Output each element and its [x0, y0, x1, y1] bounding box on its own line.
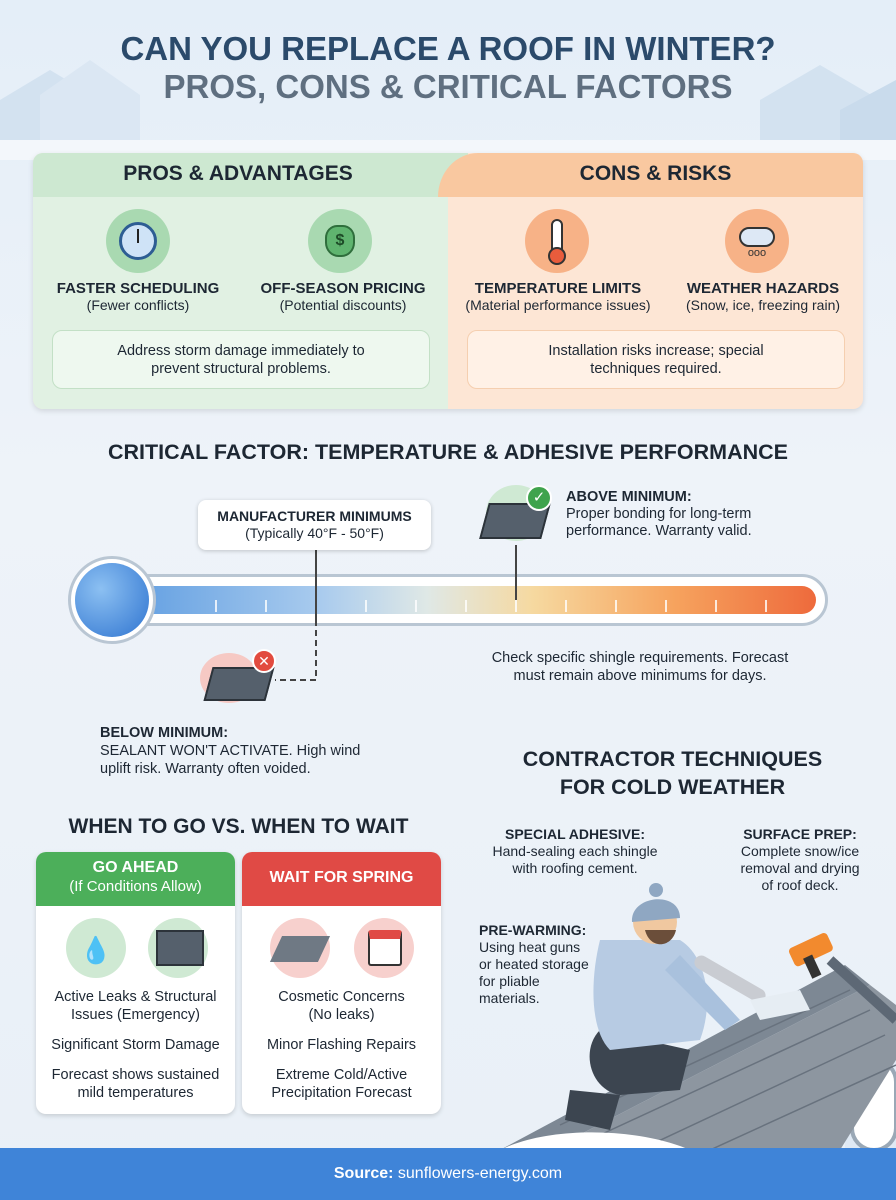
- snow: [500, 1132, 690, 1150]
- card: wait for spring: [242, 852, 441, 1114]
- text: special adhesive: [492, 826, 658, 876]
- card: go ahead: mild temperatures: [77, 1085, 194, 1101]
- text: pre-warming: or heated storage: [479, 956, 589, 972]
- chart: thermometer: [68, 556, 828, 644]
- text: above minimum: [566, 489, 752, 539]
- icon: rain cloud: [725, 209, 789, 273]
- card: go ahead: GO AHEAD: [93, 859, 178, 876]
- text: above minimum: ABOVE MINIMUM:: [566, 489, 692, 505]
- card: wait for spring: Precipitation Forecast: [271, 1085, 412, 1101]
- title: CAN YOU REPLACE A ROOF IN WINTER?: [120, 30, 776, 67]
- icon: shingle above: ✓: [533, 489, 545, 506]
- icon: shingle curl: [270, 918, 330, 978]
- icon: thermometer: [525, 209, 589, 273]
- heading: contractor techniques: [523, 747, 822, 799]
- footer: source: [0, 1148, 896, 1200]
- text: off season: OFF-SEASON PRICING: [260, 280, 426, 297]
- icon: rain cloud: ooo: [748, 247, 766, 259]
- caulk gun: [692, 953, 768, 1005]
- text: faster scheduling: FASTER SCHEDULING: [57, 280, 219, 297]
- heading: pros: PROS & ADVANTAGES: [123, 162, 353, 185]
- pros side: [33, 153, 448, 409]
- text: off season: [260, 280, 426, 313]
- callout: cons: Installation risks increase; special: [548, 343, 764, 359]
- callout: manufacturer minimums: MANUFACTURER MINIMUMS: [217, 508, 412, 524]
- heading: cons: CONS & RISKS: [580, 162, 731, 185]
- icon: leak: 💧: [80, 935, 112, 965]
- illustration: roof and worker: [504, 883, 896, 1148]
- callout: cons: techniques required.: [590, 361, 722, 377]
- callout: manufacturer minimums: [198, 500, 431, 550]
- icon: calendar: [354, 918, 414, 978]
- title: [120, 30, 776, 105]
- text: pre-warming: materials.: [479, 990, 540, 1006]
- card: go ahead: Significant Storm Damage: [51, 1037, 220, 1053]
- text: special adhesive: Hand-sealing each shingle: [492, 843, 658, 859]
- text: temperature limits: (Material performance issues): [465, 297, 651, 313]
- marker lines: [275, 545, 517, 681]
- text: pre-warming: [479, 922, 589, 1006]
- text: above minimum: performance. Warranty valid.: [566, 523, 752, 539]
- card: wait for spring: (No leaks): [308, 1007, 375, 1023]
- callout: pros: prevent structural problems.: [151, 361, 331, 377]
- footer: source: Source: sunflowers-energy.com: [334, 1165, 562, 1182]
- house wall: [845, 970, 896, 1150]
- text: pre-warming: Using heat guns: [479, 939, 580, 955]
- text: surface prep: removal and drying: [740, 860, 860, 876]
- text: faster scheduling: (Fewer conflicts): [87, 297, 189, 313]
- text: weather hazards: (Snow, ice, freezing rain): [686, 297, 840, 313]
- text: check requirements: [492, 650, 788, 684]
- worker body: [593, 940, 707, 1050]
- icon: damaged shingle: [148, 918, 208, 978]
- head: [633, 900, 677, 944]
- text: surface prep: [740, 826, 860, 893]
- icon: shingle above: [479, 485, 552, 541]
- callout: cons: [467, 330, 845, 389]
- card: go ahead: Forecast shows sustained: [52, 1067, 219, 1083]
- card: go ahead: [36, 852, 235, 1114]
- text: temperature limits: [465, 280, 651, 313]
- text: below minimum: BELOW MINIMUM:: [100, 725, 228, 741]
- text: check requirements: must remain above minimums for days.: [513, 668, 767, 684]
- text: surface prep: Complete snow/ice: [741, 843, 859, 859]
- text: weather hazards: WEATHER HAZARDS: [687, 280, 839, 297]
- icon: shingle below: [200, 649, 276, 703]
- text: weather hazards: [686, 280, 840, 313]
- card: wait for spring: Minor Flashing Repairs: [267, 1037, 416, 1053]
- callout: pros: [52, 330, 430, 389]
- text: above minimum: Proper bonding for long-term: [566, 506, 751, 522]
- text: below minimum: [100, 725, 360, 777]
- text: below minimum: SEALANT WON'T ACTIVATE. High wind: [100, 743, 360, 759]
- text: below minimum: uplift risk. Warranty often voided.: [100, 761, 311, 777]
- callout: manufacturer minimums: (Typically 40°F - 50°F): [245, 525, 384, 541]
- heading: contractor techniques: CONTRACTOR TECHNIQUES: [523, 747, 822, 771]
- text: check requirements: Check specific shingle requirements. Forecast: [492, 650, 788, 666]
- text: surface prep: of roof deck.: [761, 877, 839, 893]
- card: go ahead: Issues (Emergency): [71, 1007, 200, 1023]
- text: special adhesive: SPECIAL ADHESIVE:: [505, 826, 645, 842]
- heat gun: [788, 932, 834, 968]
- callout: pros: Address storm damage immediately to: [117, 343, 365, 359]
- heading: critical factor: CRITICAL FACTOR: TEMPERATURE & ADHESIVE PERFORMANCE: [108, 440, 788, 464]
- icon: shingle below: ✕: [258, 653, 270, 669]
- text: pre-warming: PRE-WARMING:: [479, 922, 586, 938]
- background houses: [0, 60, 896, 160]
- roof: [500, 965, 870, 1150]
- card: wait for spring: Cosmetic Concerns: [278, 989, 405, 1005]
- icon: money bag: [308, 209, 372, 273]
- icon: leak: [66, 918, 126, 978]
- panel: pros and cons: [33, 153, 863, 409]
- icon: clock: [106, 209, 170, 273]
- card: wait for spring: WAIT FOR SPRING: [270, 869, 414, 886]
- card: wait for spring: Extreme Cold/Active: [276, 1067, 407, 1083]
- text: faster scheduling: [57, 280, 219, 313]
- text: surface prep: SURFACE PREP:: [743, 826, 857, 842]
- text: off season: (Potential discounts): [280, 297, 406, 313]
- worker legs: [590, 1030, 690, 1095]
- heading: contractor techniques: FOR COLD WEATHER: [560, 775, 785, 799]
- icon: money bag: $: [336, 232, 344, 249]
- heading: when to go: WHEN TO GO VS. WHEN TO WAIT: [69, 815, 408, 838]
- title: PROS, CONS & CRITICAL FACTORS: [164, 68, 732, 105]
- text: pre-warming: for pliable: [479, 973, 540, 989]
- card: go ahead: Active Leaks & Structural: [54, 989, 216, 1005]
- text: temperature limits: TEMPERATURE LIMITS: [475, 280, 641, 297]
- card: go ahead: (If Conditions Allow): [69, 878, 202, 895]
- text: special adhesive: with roofing cement.: [512, 860, 638, 876]
